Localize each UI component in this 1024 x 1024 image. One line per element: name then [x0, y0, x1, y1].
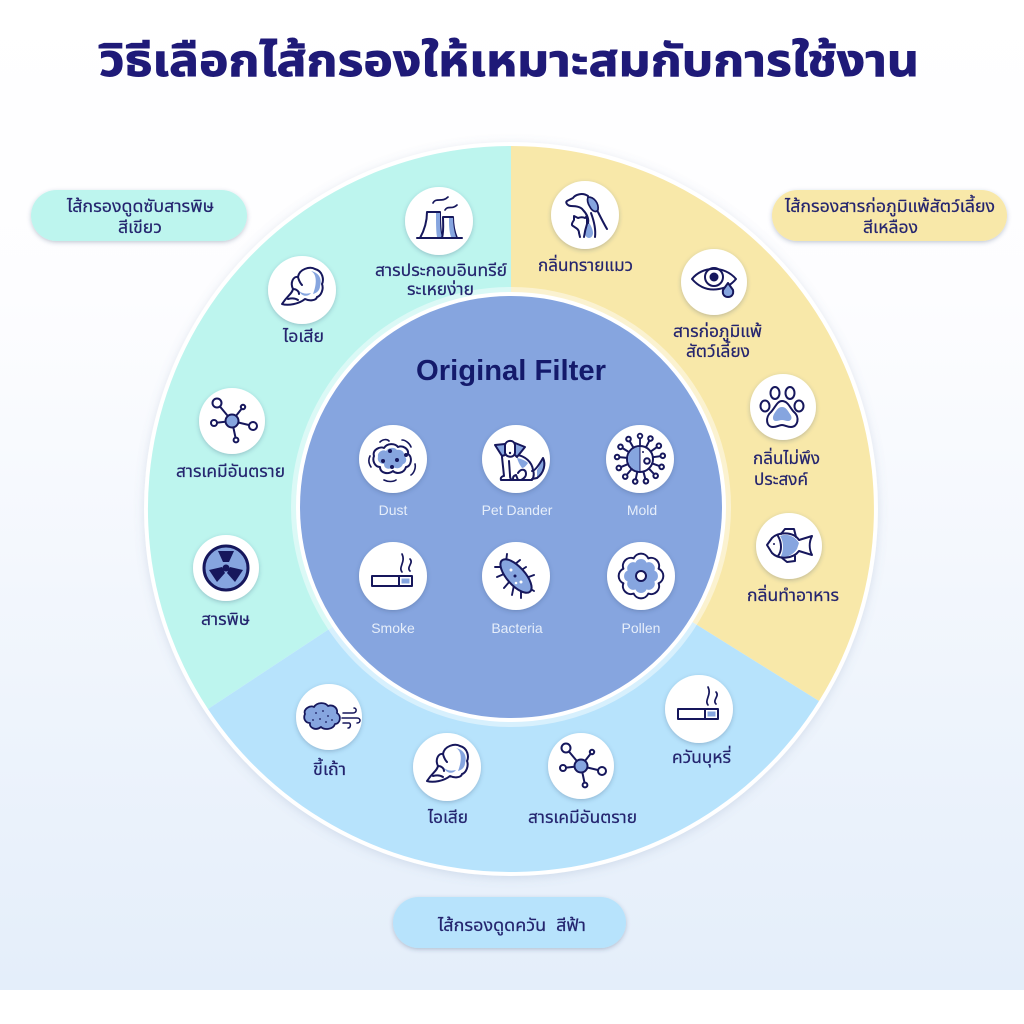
label: odor: ไอเสีย	[282, 327, 324, 346]
icon: dog and cat	[551, 181, 619, 249]
icon: eye with tear	[681, 249, 747, 315]
icon: power plant	[405, 187, 473, 255]
label: Bacteria: Bacteria	[491, 620, 543, 636]
pill: green filter	[31, 190, 247, 241]
icon: fish	[756, 513, 822, 579]
label: ash: ขี้เถ้า	[313, 757, 346, 779]
pill: yellow filter: สีเหลือง	[863, 218, 918, 237]
label: pets: สัตว์เลี้ยง	[686, 339, 750, 361]
icon: molecule	[199, 388, 265, 454]
label: pet allergens: สารก่อภูมิแพ้	[673, 321, 762, 343]
pill: green filter: ไส้กรองดูดซับสารพิษ	[66, 196, 214, 218]
icon: virus mold	[606, 425, 674, 493]
panel: green segment	[148, 146, 511, 709]
heading: Original Filter: Original Filter	[416, 355, 606, 387]
icon: cigarette	[665, 675, 733, 743]
label: unwanted smell line 2: ประสงค์	[754, 470, 808, 489]
pill: green filter: สีเขียว	[118, 218, 162, 237]
panel: center circle	[300, 296, 722, 718]
label: Smoke: Smoke	[371, 620, 415, 636]
label: cat litter smell: กลิ่นทรายแมว	[538, 254, 633, 275]
icon: bacteria	[482, 542, 550, 610]
label: toxins: สารพิษ	[201, 610, 250, 629]
label: hazardous chemicals 2: สารเคมีอันตราย	[528, 808, 637, 827]
icon: puppy	[482, 425, 550, 493]
icon: ash cloud	[296, 684, 362, 750]
icon: cloud of odor	[268, 256, 336, 324]
icon: dust	[359, 425, 427, 493]
label: odor 2: ไอเสีย	[427, 808, 468, 827]
pill: yellow filter	[772, 190, 1007, 241]
label: cooking smell: กลิ่นทำอาหาร	[747, 584, 839, 605]
label: Dust: Dust	[379, 502, 407, 518]
icon: smoke	[359, 542, 427, 610]
pill: blue filter: ไส้กรองดูดควัน สีฟ้า	[437, 915, 586, 937]
label: Pollen: Pollen	[622, 620, 660, 636]
label: Pet Dander: Pet Dander	[482, 502, 553, 518]
label: volatile: ระเหยง่าย	[407, 280, 474, 299]
label: organic compounds: สารประกอบอินทรีย์	[375, 261, 507, 280]
pill: blue filter	[393, 897, 626, 948]
icon: radiation	[193, 535, 259, 601]
label: Mold: Mold	[627, 502, 657, 518]
label: cigarette smoke: ควันบุหรี่	[672, 745, 731, 768]
wheel	[144, 142, 878, 876]
title: วิธีเลือกไส้กรองให้เหมาะสมกับการใช้งาน	[99, 37, 919, 86]
icon: molecule 2	[548, 733, 614, 799]
pill: yellow filter: ไส้กรองสารก่อภูมิแพ้สัตว์เลี้ยง	[784, 194, 995, 218]
label: hazardous chemicals: สารเคมีอันตราย	[176, 462, 285, 481]
label: unwanted smell: กลิ่นไม่พึง	[753, 447, 820, 468]
panel: blue segment	[208, 509, 819, 872]
icon: pollen flower	[607, 542, 675, 610]
icon: cloud 2	[413, 733, 481, 801]
panel: yellow segment	[511, 146, 874, 701]
icon: paw	[750, 374, 816, 440]
